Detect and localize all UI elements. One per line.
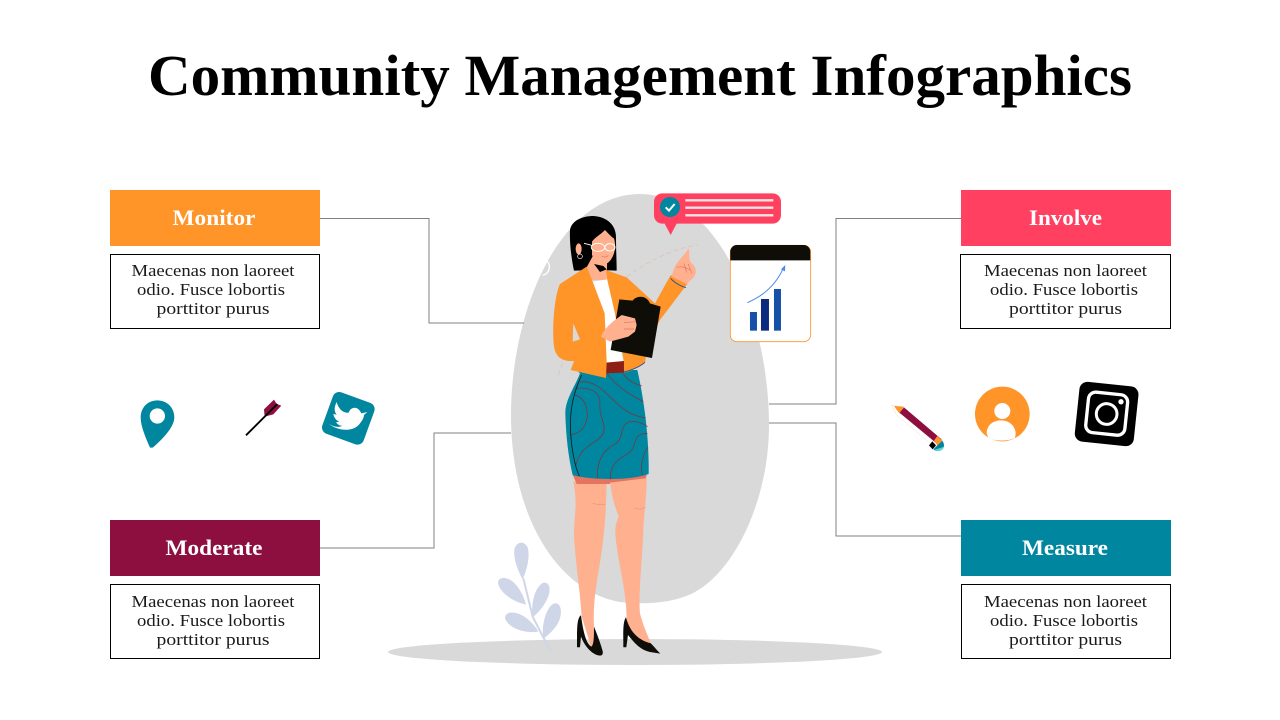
panel: measure: odio. Fusce lobortis xyxy=(990,611,1138,630)
panel: moderate: Moderate xyxy=(166,535,263,560)
grey backdrop blob xyxy=(511,194,769,603)
icon: user avatar xyxy=(975,387,1030,441)
panel: involve: Involve xyxy=(1029,205,1102,230)
panel: monitor xyxy=(110,190,320,328)
ground shadow xyxy=(388,639,882,665)
legs xyxy=(573,478,652,648)
panel: moderate xyxy=(110,520,320,658)
white ring xyxy=(543,260,549,275)
neck xyxy=(587,255,607,280)
panel: monitor: porttitor purus xyxy=(156,299,270,318)
neck shadow xyxy=(594,264,607,272)
speech bubble xyxy=(654,193,781,235)
smile xyxy=(602,255,608,257)
leaf plant xyxy=(498,543,561,652)
panel: moderate: odio. Fusce lobortis xyxy=(137,611,285,630)
hair xyxy=(570,216,617,271)
panel: monitor: Maecenas non laoreet xyxy=(132,261,295,280)
panel: measure: porttitor purus xyxy=(1009,630,1122,649)
title: Community Management Infographics xyxy=(148,43,1132,108)
icon: instagram xyxy=(1074,381,1139,447)
jacket fold xyxy=(573,323,580,342)
icon: dart arrow xyxy=(246,400,281,435)
icon: location pin xyxy=(141,400,174,448)
belt xyxy=(606,361,624,373)
face xyxy=(592,230,615,264)
clipboard xyxy=(611,297,661,358)
skirt xyxy=(565,370,649,479)
panel: involve: porttitor purus xyxy=(1009,299,1122,318)
shoes xyxy=(577,615,660,656)
icon: twitter xyxy=(320,390,377,447)
cuffs xyxy=(624,278,686,372)
panel: involve: Maecenas non laoreet xyxy=(984,261,1147,280)
panel: monitor: odio. Fusce lobortis xyxy=(137,280,285,299)
earring xyxy=(578,254,582,259)
finger lines xyxy=(624,263,692,329)
panel: measure: Measure xyxy=(1022,535,1108,560)
chart card xyxy=(730,245,811,342)
ear xyxy=(576,243,582,255)
knee creases xyxy=(593,503,646,509)
panel: moderate: porttitor purus xyxy=(156,630,270,649)
panel: involve xyxy=(960,190,1171,328)
woman upper body xyxy=(543,193,811,378)
panel: measure xyxy=(961,520,1171,658)
skirt pattern xyxy=(571,373,648,479)
dashed motion path xyxy=(558,245,697,375)
panel: moderate: Maecenas non laoreet xyxy=(132,592,295,611)
glasses xyxy=(584,243,615,251)
connector lines xyxy=(320,218,961,548)
panel: involve: odio. Fusce lobortis xyxy=(990,280,1138,299)
hands xyxy=(601,315,637,342)
jacket xyxy=(553,267,687,378)
shirt xyxy=(593,279,623,363)
under skirt xyxy=(573,475,647,484)
panel: measure: Maecenas non laoreet xyxy=(984,592,1147,611)
panel: monitor: Monitor xyxy=(172,205,256,230)
icon: pencil xyxy=(892,405,944,451)
woman lower body xyxy=(565,370,660,656)
